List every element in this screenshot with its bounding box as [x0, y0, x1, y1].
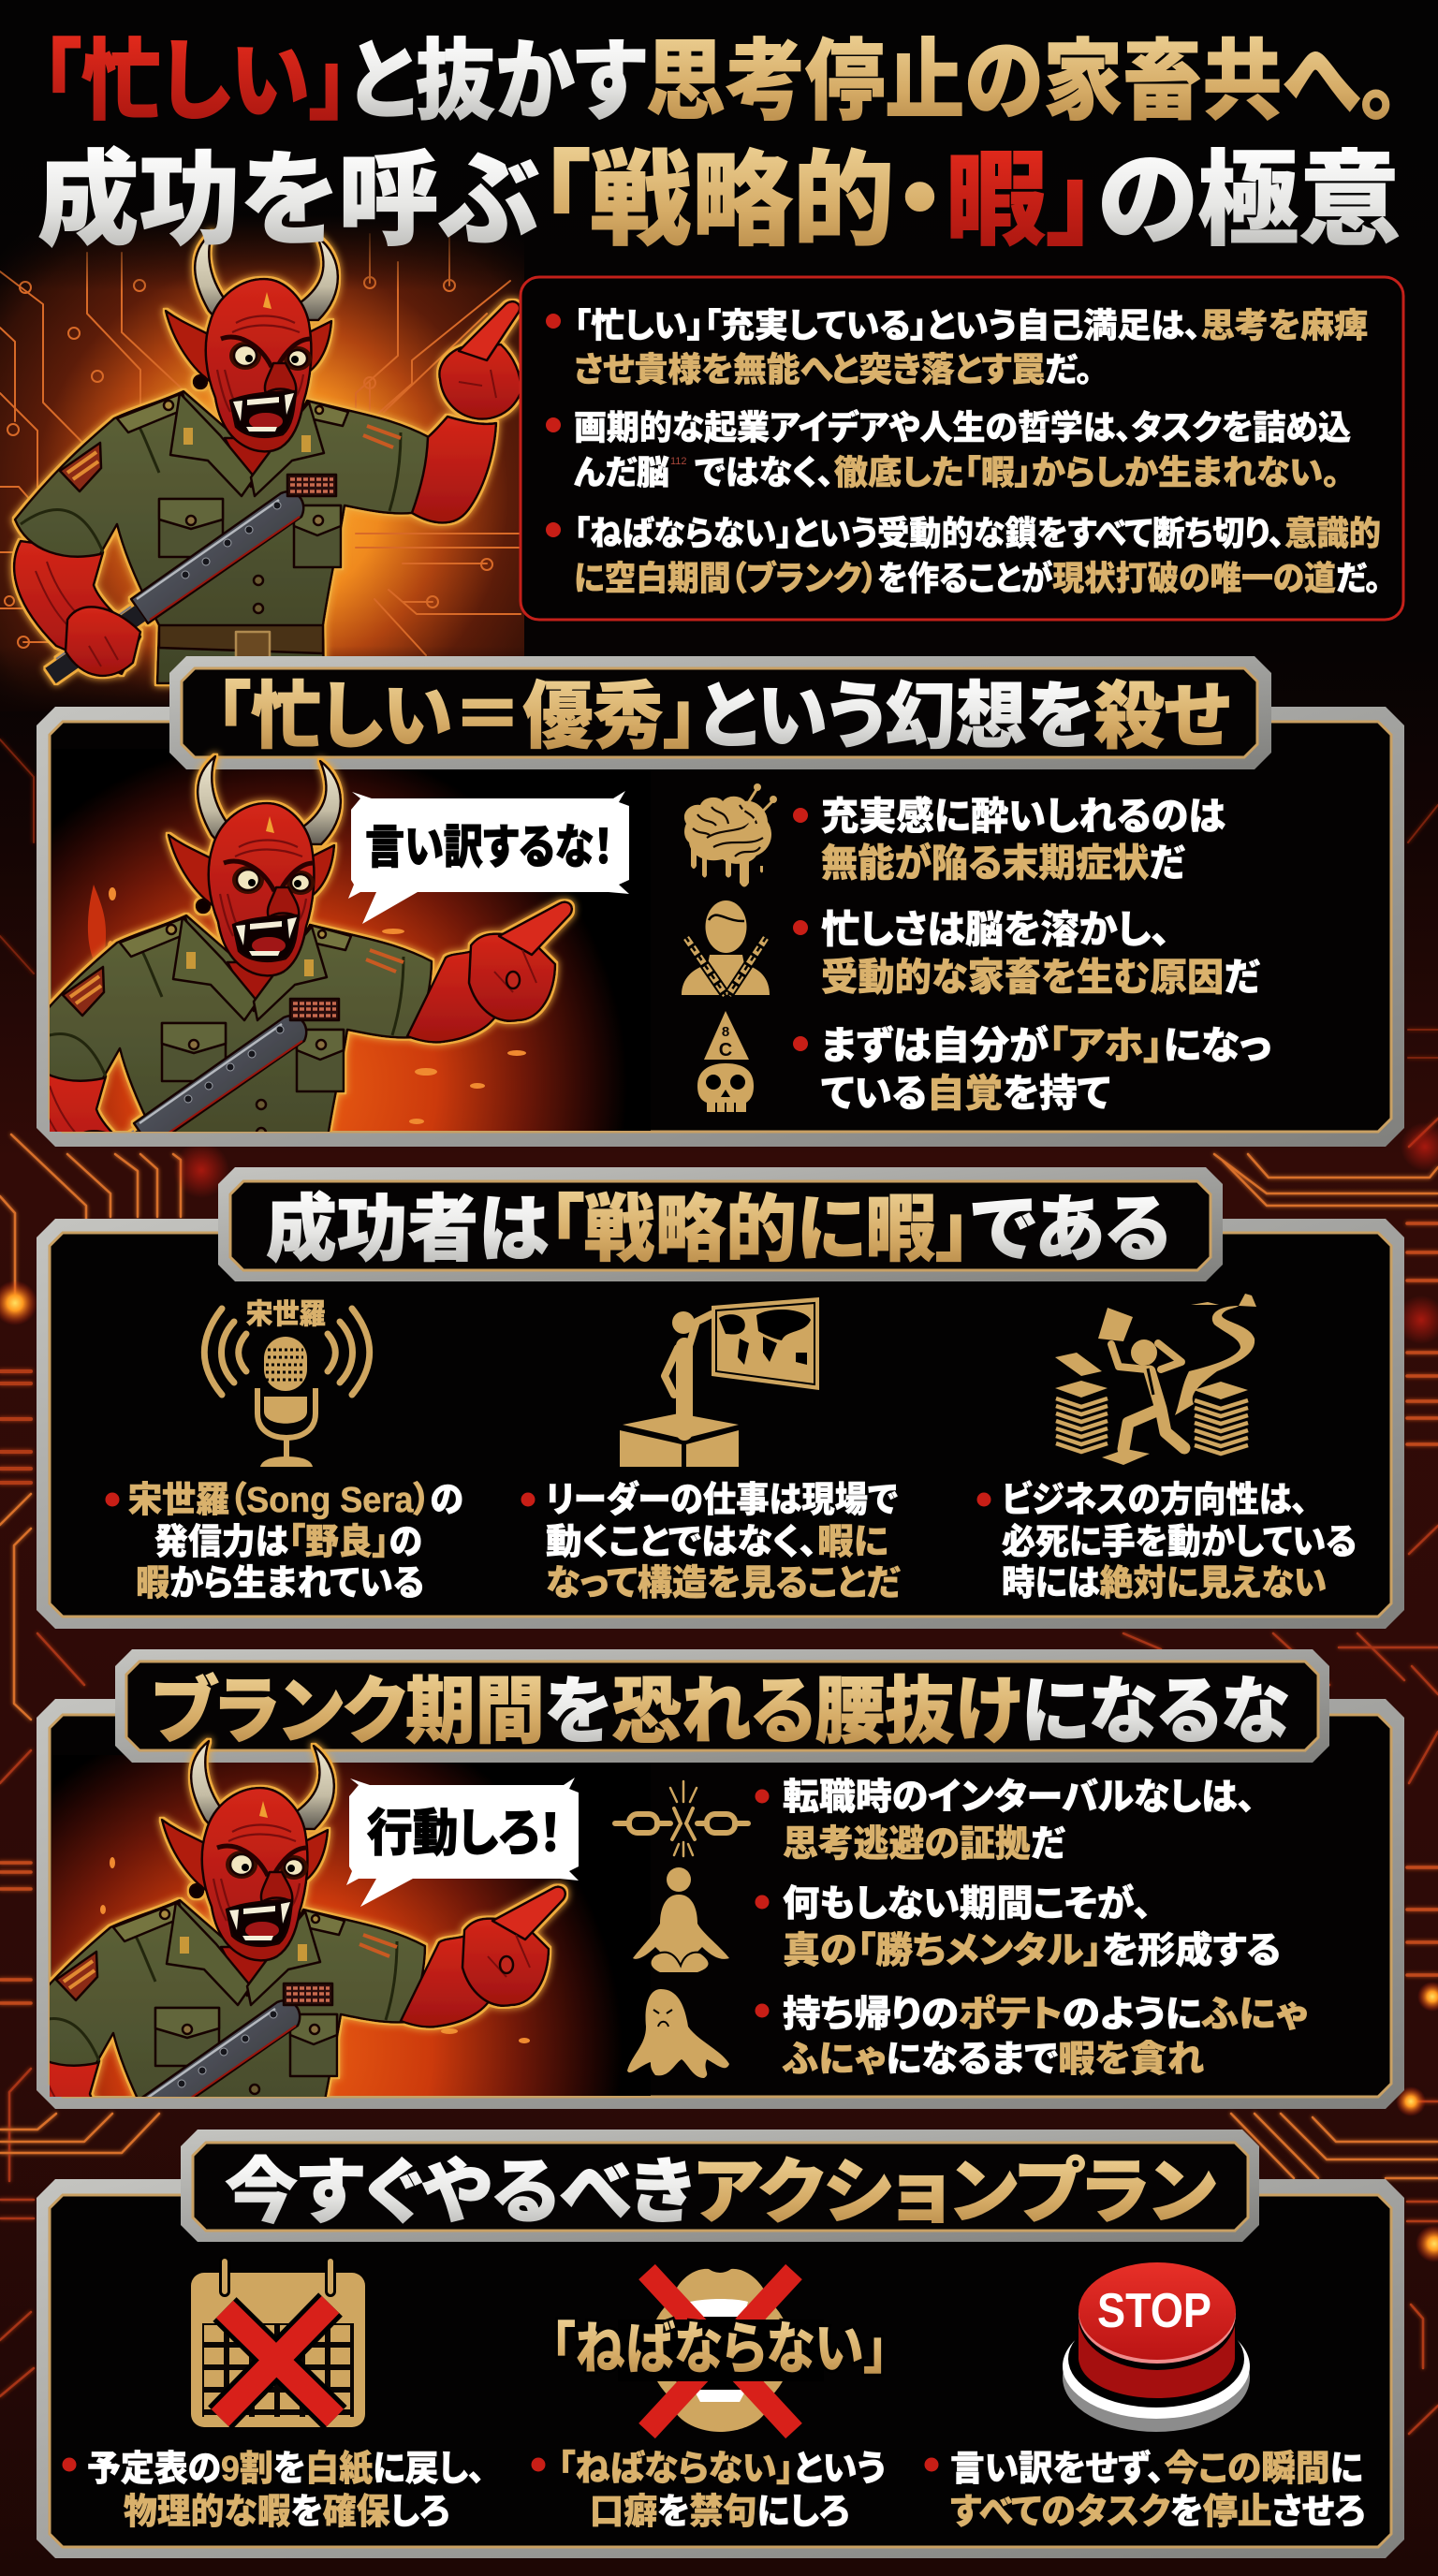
- speech bubble: [348, 791, 629, 924]
- background glowing nodes: [0, 1122, 1438, 2262]
- text: panel 3 points: [755, 1778, 1308, 2080]
- panel 3: ブランク期間: [37, 1649, 1404, 2109]
- header plate: [181, 2130, 1259, 2242]
- text: panel 1 points: [793, 795, 1271, 1115]
- devil pointing: [50, 1733, 575, 2097]
- speech bubble: 言い訳するな！: [365, 821, 613, 873]
- text: column 1: 発信力は「野良」の: [154, 1523, 422, 1562]
- icon: microphone: 宋世羅: [246, 1299, 326, 1330]
- text: panel 3 points: 何もしない期間こそが、: [783, 1883, 1152, 1925]
- text: action 3: [925, 2450, 1365, 2532]
- text: panel 1 points: ている自覚を持て: [821, 1072, 1110, 1115]
- devil: top, pointing upward: [14, 232, 521, 683]
- text: action 1: 物理的な暇を確保しろ: [124, 2493, 449, 2532]
- text: column 3: 時には絶対に見えない: [1002, 1564, 1327, 1603]
- icon: chained person: [682, 900, 770, 995]
- text: column 2: [521, 1480, 901, 1603]
- heading: 成功者は「戦略的に暇」である: [266, 1188, 1170, 1270]
- icon: melted figure: [627, 1989, 729, 2078]
- text: column 2: リーダーの仕事は現場で: [546, 1480, 898, 1520]
- text: panel 1 points: 忙しさは脳を溶かし、: [821, 908, 1170, 951]
- panel 4: アクションプラン: [37, 2130, 1404, 2558]
- title line 2: 成功を呼ぶ「戦略的・暇」の極意: [37, 143, 1401, 258]
- text: action 2: 口癖を禁句にしろ: [590, 2493, 849, 2532]
- icon: melting brain: [684, 783, 777, 887]
- bullet 1: [546, 306, 1368, 388]
- text: column 2: なって構造を見ることだ: [546, 1564, 901, 1603]
- icon: skull with dunce cap: C: [719, 1040, 732, 1061]
- text: column 3: ビジネスの方向性は、: [1002, 1480, 1308, 1520]
- text: panel 3 points: 思考逃避の証拠だ: [783, 1824, 1065, 1865]
- icon: crossed-out mouth: [550, 2269, 888, 2432]
- text: panel 1 points: 受動的な家畜を生む原因だ: [821, 956, 1260, 999]
- text: panel 3 points: 真の「勝ちメンタル」を形成する: [783, 1930, 1281, 1971]
- text: panel 3 points: ふにゃになるまで暇を貪れ: [782, 2040, 1204, 2080]
- icon: broken chain: [615, 1781, 748, 1856]
- text: panel 1 points: まずは自分が「アホ」になっ: [821, 1024, 1271, 1067]
- speech bubble: [346, 1778, 579, 1907]
- panel: summary text box: [521, 277, 1403, 620]
- bullet 3: [546, 514, 1381, 597]
- text: panel 1 points: 無能が陥る末期症状だ: [821, 842, 1185, 885]
- bullet 2: んだ脳: [574, 453, 669, 491]
- text: action 2: 「ねばならない」という: [558, 2450, 886, 2489]
- header plate: [218, 1167, 1223, 1281]
- panel 3 glow: [51, 1755, 651, 2096]
- text: action 2: [532, 2450, 886, 2532]
- text: action 1: 予定表の9割を白紙に戻し、: [87, 2450, 485, 2489]
- circuit traces behind the devil: [0, 234, 521, 655]
- text: column 2: 動くことではなく、暇に: [546, 1523, 888, 1562]
- title line 1: 「忙しい」と抜かす思考停止の家畜共へ。: [41, 32, 1400, 130]
- panel 1: 忙しい＝優秀: [37, 656, 1404, 1147]
- icon: microphone: [204, 1299, 370, 1467]
- icon: skull with dunce cap: 8: [722, 1024, 729, 1040]
- text: action 3: すべてのタスクを停止させろ: [950, 2493, 1365, 2532]
- text: panel 3 points: 転職時のインターバルなしは、: [783, 1778, 1255, 1818]
- icon: crossed-out mouth: 「ねばならない」: [550, 2318, 888, 2380]
- panel 3 sparks: [100, 1857, 530, 2043]
- main title: [37, 32, 1401, 258]
- devil glow background: [0, 215, 524, 711]
- icon: leader viewing world map: [620, 1297, 819, 1467]
- text: panel 1 points: 充実感に酔いしれるのは: [821, 795, 1226, 838]
- heading: 今すぐやるべきアクションプラン: [225, 2153, 1216, 2232]
- text: column 1: 暇から生まれている: [136, 1564, 424, 1603]
- bullet 2: ではなく、徹底した「暇」からしか生まれない。: [695, 453, 1340, 491]
- text: column 1: [105, 1481, 463, 1603]
- bullet 2: 画期的な起業アイデアや人生の哲学は、タスクを詰め込: [574, 408, 1351, 446]
- icon: crossed-out calendar: [191, 2261, 365, 2427]
- panel 1 flames and sparks: [88, 885, 526, 1124]
- text: column 3: [977, 1480, 1357, 1603]
- bullet 2: [546, 408, 1351, 491]
- bullet 1: させ貴様を無能へと突き落とす罠だ。: [574, 350, 1093, 388]
- text: column 1: 宋世羅（Song Sera）の: [128, 1481, 463, 1520]
- background circuit traces: [0, 739, 1438, 2434]
- speech bubble: 行動しろ！: [367, 1806, 562, 1862]
- panel 1 glow: [51, 749, 651, 1131]
- text: column 3: 必死に手を動かしている: [1002, 1523, 1357, 1562]
- bullet 3: 「ねばならない」という受動的な鎖をすべて断ち切り、意識的: [574, 514, 1381, 552]
- bullet 1: 「忙しい」「充実している」という自己満足は、思考を麻痺: [574, 306, 1368, 344]
- devil pointing: [50, 748, 580, 1132]
- header plate: [169, 656, 1271, 769]
- text: action 3: 言い訳をせず、今この瞬間に: [950, 2450, 1363, 2489]
- bullet 3: に空白期間（ブランク）を作ることが現状打破の唯一の道だ。: [574, 559, 1381, 597]
- icon: panicked person and paper piles: [1055, 1294, 1256, 1465]
- icon: stop button: STOP: [1097, 2284, 1211, 2338]
- icon: meditating figure: [633, 1867, 729, 1972]
- heading: 「忙しい＝優秀」という幻想を殺せ: [215, 675, 1230, 757]
- header plate: [115, 1649, 1329, 1763]
- bullet 2: 112: [670, 456, 687, 467]
- heading: ブランク期間を恐れる腰抜けになるな: [152, 1670, 1289, 1752]
- text: action 1: [62, 2450, 485, 2532]
- text: panel 3 points: 持ち帰りのポテトのようにふにゃ: [783, 1995, 1308, 2035]
- icon: stop button: [1063, 2262, 1250, 2432]
- panel 2: 成功者は戦略的に暇: [37, 1167, 1404, 1629]
- icon: skull with dunce cap: [697, 1011, 754, 1112]
